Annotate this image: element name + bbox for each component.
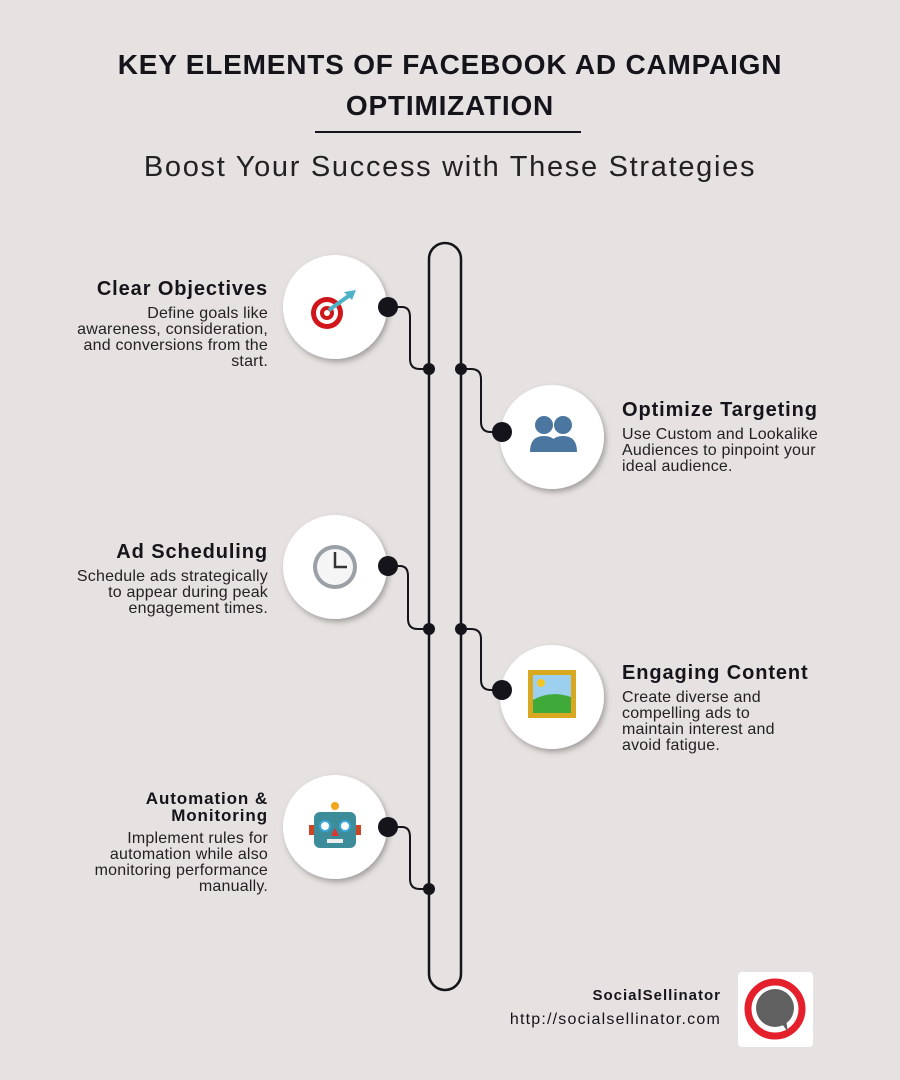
subtitle: Boost Your Success with These Strategies	[144, 151, 756, 183]
item: Engaging Content: compelling ads to	[622, 705, 750, 722]
item: Optimize Targeting	[622, 399, 818, 475]
item: Optimize Targeting: ideal audience.	[622, 458, 733, 475]
item: Optimize Targeting: Optimize Targeting	[622, 399, 818, 421]
item: Ad Scheduling: Schedule ads strategically	[77, 568, 268, 585]
item: Ad Scheduling: to appear during peak	[108, 584, 268, 601]
item: Ad Scheduling: engagement times.	[129, 600, 268, 617]
item: Engaging Content: avoid fatigue.	[622, 737, 720, 754]
title	[118, 49, 782, 121]
footer brand text: SocialSellinator	[592, 987, 721, 1004]
item: Ad Scheduling: Ad Scheduling	[116, 541, 268, 563]
logo	[738, 972, 813, 1047]
item: Engaging Content: maintain interest and	[622, 721, 775, 738]
item: Automation & Monitoring: monitoring performance	[95, 862, 268, 879]
icon: target	[311, 290, 356, 329]
item: Clear Objectives: Clear Objectives	[97, 278, 268, 300]
footer brand text: http://socialsellinator.com	[510, 1011, 721, 1028]
icon: clock	[313, 545, 357, 589]
circles	[283, 255, 604, 879]
item: Clear Objectives: start.	[231, 353, 268, 370]
item: Automation & Monitoring: manually.	[199, 878, 268, 895]
item: Automation & Monitoring: Implement rules for	[127, 830, 268, 847]
item: Clear Objectives	[77, 278, 268, 370]
item: Automation & Monitoring: Monitoring	[171, 806, 268, 825]
item: Automation & Monitoring: automation while also	[110, 846, 268, 863]
title: KEY ELEMENTS OF FACEBOOK AD CAMPAIGN	[118, 49, 782, 80]
icon: framed picture	[528, 670, 576, 718]
item: Clear Objectives: Define goals like	[147, 305, 268, 322]
item: Automation & Monitoring	[95, 789, 268, 895]
item: Clear Objectives: awareness, consideration,	[77, 321, 268, 338]
item: Clear Objectives: and conversions from the	[84, 337, 268, 354]
divider line	[315, 131, 581, 133]
item: Optimize Targeting: Use Custom and Lookalike	[622, 426, 818, 443]
icon: robot	[309, 802, 361, 848]
item: Automation & Monitoring: Automation &	[146, 789, 268, 808]
item: Engaging Content	[622, 662, 809, 754]
item: Engaging Content: Engaging Content	[622, 662, 809, 684]
connectors	[388, 307, 502, 889]
dots	[378, 297, 512, 895]
icon: people	[530, 416, 577, 452]
item: Optimize Targeting: Audiences to pinpoint your	[622, 442, 816, 459]
title: OPTIMIZATION	[346, 90, 554, 121]
track	[429, 243, 461, 990]
footer brand text	[510, 987, 721, 1028]
item: Engaging Content: Create diverse and	[622, 689, 761, 706]
item: Ad Scheduling	[77, 541, 268, 617]
